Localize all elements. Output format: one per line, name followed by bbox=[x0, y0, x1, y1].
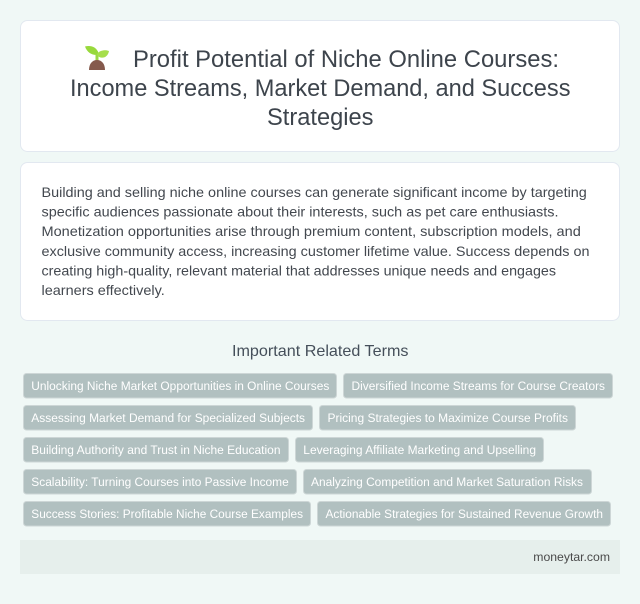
panel: summary paragraph bbox=[20, 162, 620, 320]
text block: description: specific audiences passionate about their interests, such as pet care enthusiasts. bbox=[42, 204, 558, 220]
title: Profit Potential of Niche Online Courses: bbox=[133, 46, 559, 73]
text block: description: Monetization opportunities arise through premium content, subscription models, and bbox=[42, 223, 581, 239]
panel: related term tags bbox=[24, 374, 612, 526]
title: Strategies bbox=[267, 104, 374, 131]
tag: Assessing Market Demand for Specialized Subjects bbox=[31, 411, 305, 425]
tag: Analyzing Competition and Market Saturation Risks bbox=[311, 475, 583, 489]
tag: Actionable Strategies for Sustained Revenue Growth bbox=[326, 507, 603, 521]
tag bbox=[24, 406, 312, 430]
title: Income Streams, Market Demand, and Success bbox=[70, 75, 570, 102]
tag: Building Authority and Trust in Niche Education bbox=[31, 443, 281, 457]
tag bbox=[24, 502, 310, 526]
tag: Leveraging Affiliate Marketing and Upselling bbox=[303, 443, 536, 457]
footer source: moneytar.com bbox=[533, 550, 610, 564]
tag: Unlocking Niche Market Opportunities in Online Courses bbox=[31, 379, 329, 393]
tag bbox=[24, 470, 296, 494]
tag: Scalability: Turning Courses into Passive Income bbox=[31, 475, 289, 489]
tag bbox=[24, 438, 288, 462]
heading: related terms: Important Related Terms bbox=[232, 343, 408, 360]
tag bbox=[344, 374, 612, 398]
text block: description: exclusive community access, increasing customer lifetime value. Success depends on bbox=[42, 243, 590, 259]
text block: description: learners effectively. bbox=[42, 282, 165, 298]
title bbox=[70, 46, 570, 131]
tag bbox=[296, 438, 544, 462]
icon: seedling bbox=[85, 46, 109, 70]
text block: description: Building and selling niche online courses can generate significant income by targeting bbox=[42, 184, 587, 200]
tag: Success Stories: Profitable Niche Course Examples bbox=[31, 507, 303, 521]
tag bbox=[24, 374, 336, 398]
text block: description: creating high-quality, relevant material that addresses unique needs and engages bbox=[42, 262, 556, 278]
tag bbox=[318, 502, 610, 526]
tag bbox=[304, 470, 592, 494]
tag: Diversified Income Streams for Course Creators bbox=[352, 379, 605, 393]
text block: description bbox=[42, 184, 590, 298]
panel: title card bbox=[20, 20, 620, 152]
footer bbox=[20, 540, 620, 574]
tag: Pricing Strategies to Maximize Course Profits bbox=[328, 411, 568, 425]
tag bbox=[320, 406, 576, 430]
